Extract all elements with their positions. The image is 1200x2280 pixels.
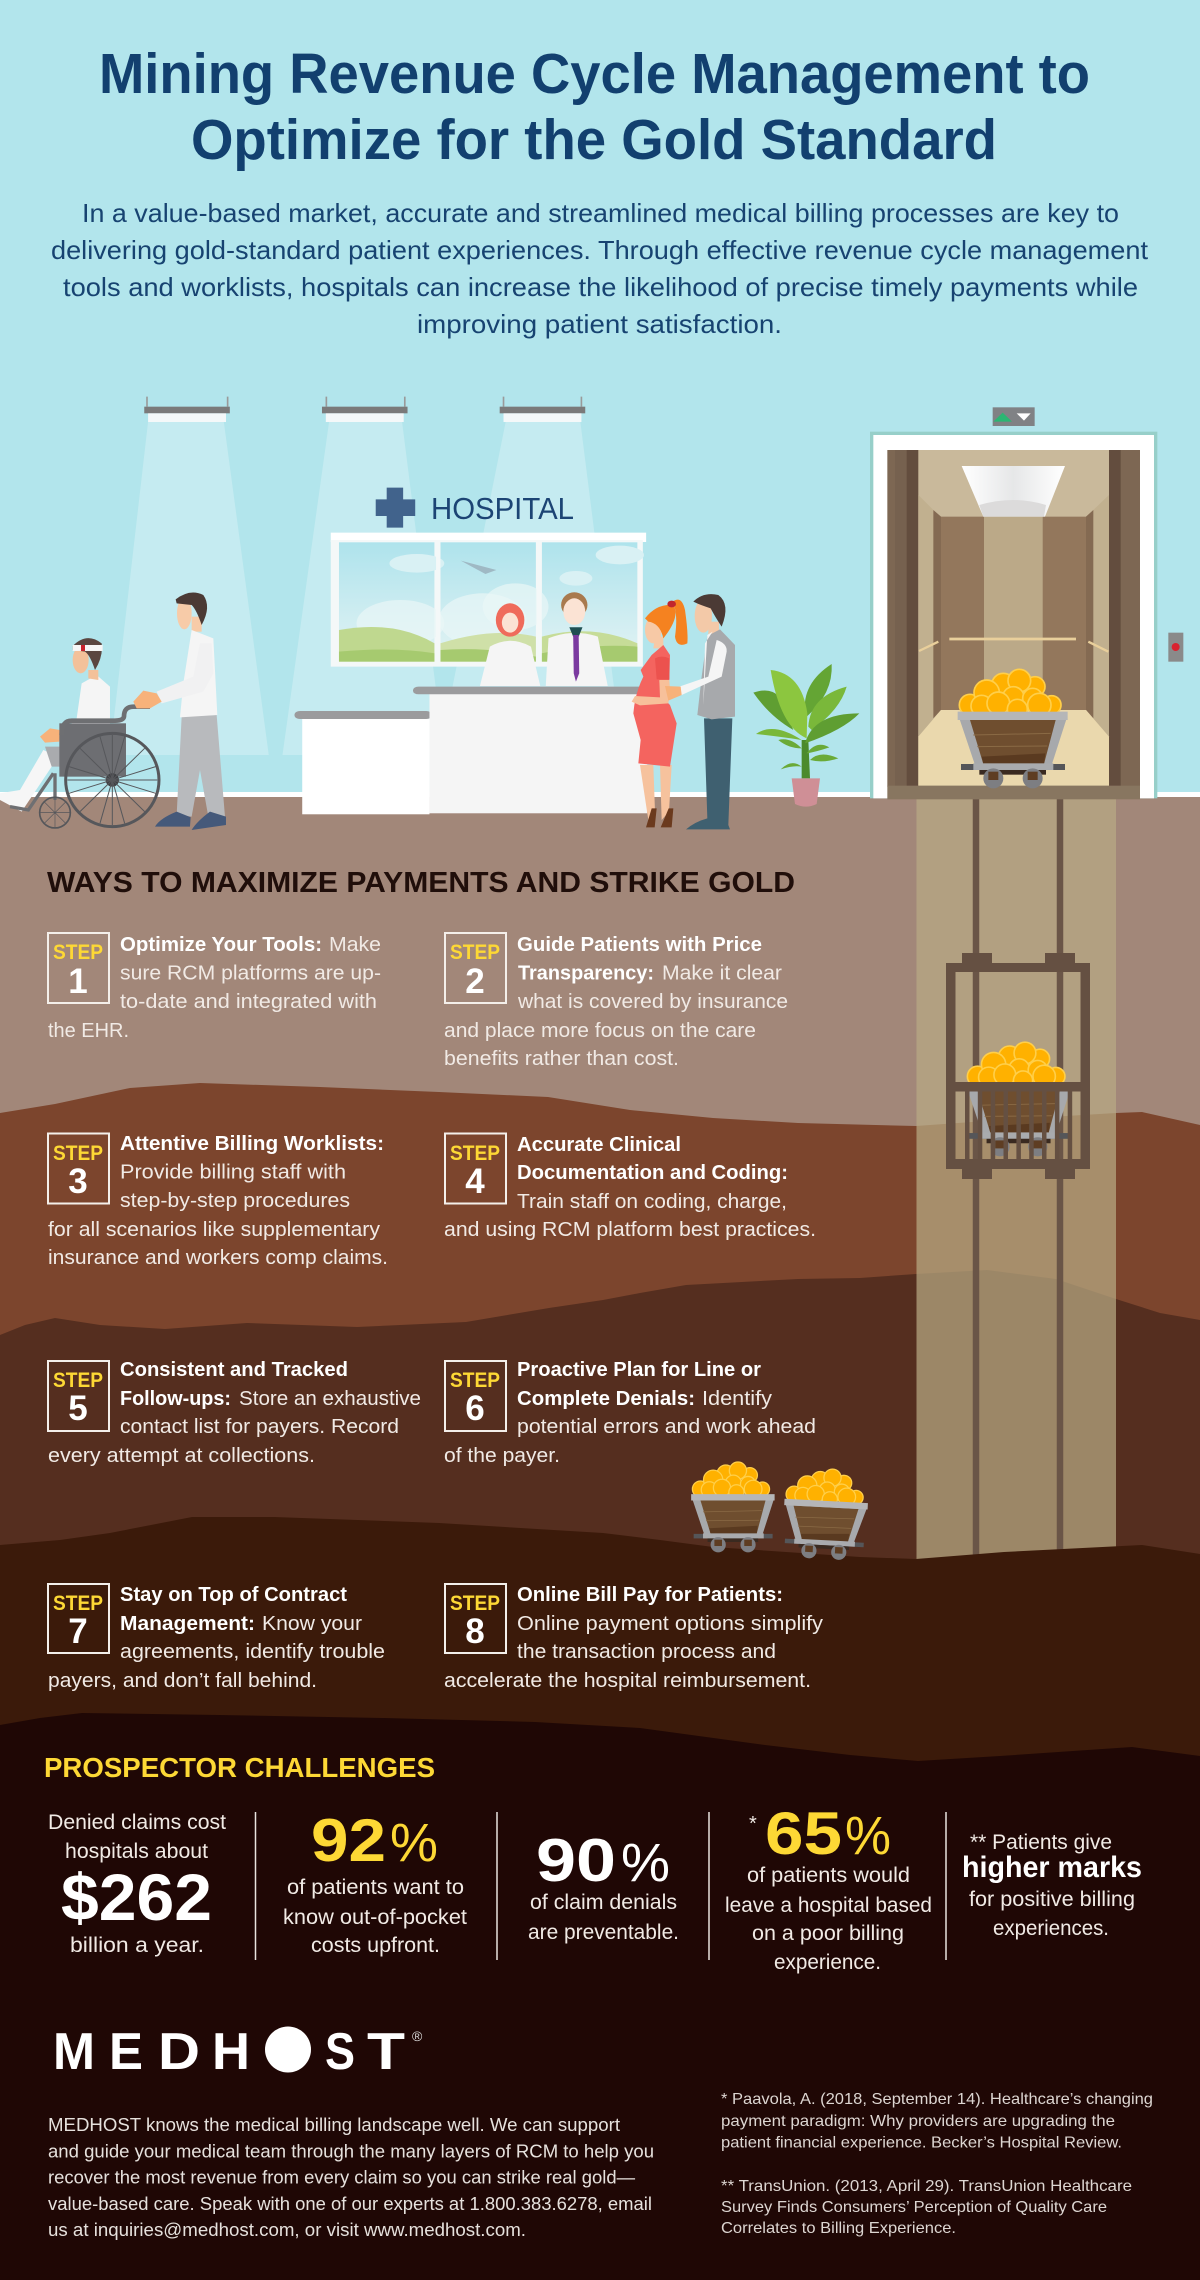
step 2: and place more focus on the care bbox=[444, 1019, 756, 1042]
intro paragraph: tools and worklists, hospitals can increase the likelihood of precise timely payments while bbox=[63, 272, 1138, 302]
stat dividers bbox=[256, 1812, 946, 1960]
section heading: prospector challenges: PROSPECTOR CHALLENGES bbox=[44, 1752, 435, 1783]
stat: 65%: leave a hospital based bbox=[725, 1894, 932, 1917]
side counter bbox=[295, 711, 432, 814]
step 6: of the payer. bbox=[444, 1444, 560, 1467]
step 7: STEP bbox=[53, 1592, 103, 1615]
company description: recover the most revenue from every claim so you can strike real gold— bbox=[48, 2166, 635, 2188]
stat: 65%: of patients would bbox=[747, 1864, 910, 1887]
step 7: Know your bbox=[262, 1612, 362, 1635]
intro paragraph: delivering gold-standard patient experiences. Through effective revenue cycle management bbox=[51, 235, 1149, 265]
references: patient financial experience. Becker’s Hospital Review. bbox=[721, 2134, 1122, 2152]
patient in wheelchair and nurse bbox=[0, 592, 226, 830]
step 7: payers, and don’t fall behind. bbox=[48, 1669, 317, 1692]
references: * Paavola, A. (2018, September 14). Healthcare’s changing bbox=[721, 2091, 1153, 2108]
step 8: accelerate the hospital reimbursement. bbox=[444, 1669, 811, 1692]
references: ** TransUnion. (2013, April 29). TransUnion Healthcare bbox=[721, 2178, 1132, 2195]
soil layer 3 bbox=[0, 1270, 1200, 1600]
hospital sign bbox=[376, 488, 574, 528]
elevator sill bbox=[887, 786, 1140, 799]
step 4 bbox=[444, 1133, 816, 1241]
step 6: Proactive Plan for Line or bbox=[517, 1358, 761, 1381]
hills bbox=[339, 627, 434, 662]
step 5: Store an exhaustive bbox=[239, 1387, 421, 1410]
stat: $262 billion bbox=[48, 1811, 226, 1957]
stat: 90%: are preventable. bbox=[528, 1921, 679, 1944]
wall background bbox=[0, 0, 1200, 800]
gold carts on ledge bbox=[691, 1462, 870, 1561]
nurse bbox=[133, 592, 226, 830]
step 5: every attempt at collections. bbox=[48, 1444, 315, 1467]
stat: 90% bbox=[528, 1827, 679, 1944]
shaft cables bbox=[976, 797, 1060, 1560]
stat: 92%: of patients want to bbox=[287, 1876, 464, 1899]
step 4: Documentation and Coding: bbox=[517, 1161, 788, 1184]
step 3: step-by-step procedures bbox=[120, 1189, 350, 1212]
couple at counter bbox=[632, 594, 735, 829]
step 4: STEP bbox=[450, 1142, 500, 1165]
step 5: Consistent and Tracked bbox=[120, 1358, 348, 1381]
receptionist man bbox=[546, 592, 608, 686]
stat: higher marks: higher marks bbox=[962, 1851, 1142, 1884]
step 7: agreements, identify trouble bbox=[120, 1640, 385, 1663]
stat: 65%: on a poor billing bbox=[752, 1922, 904, 1945]
potted plant bbox=[753, 664, 859, 807]
stat: 92%: 92 bbox=[311, 1807, 386, 1874]
step 7: Stay on Top of Contract bbox=[120, 1583, 347, 1606]
airplane bbox=[461, 561, 496, 574]
step 8: Online payment options simplify bbox=[517, 1612, 824, 1635]
soil layer 4 bbox=[0, 1517, 1200, 1800]
stat: 65%: 65 bbox=[765, 1800, 842, 1867]
step 4: Accurate Clinical bbox=[517, 1133, 681, 1156]
step 2: Make it clear bbox=[662, 962, 782, 984]
step 7: 7 bbox=[68, 1612, 88, 1651]
title bbox=[99, 42, 1090, 172]
step 1: to-date and integrated with bbox=[120, 990, 377, 1013]
ceiling lights bbox=[110, 397, 623, 755]
step 2: Transparency: bbox=[518, 962, 654, 984]
step 6: STEP bbox=[450, 1369, 500, 1392]
white baseboard bbox=[0, 792, 1200, 797]
MEDHOST logo: M bbox=[53, 2023, 95, 2081]
step 8: 8 bbox=[465, 1612, 485, 1651]
stat: $262 billion: Denied claims cost bbox=[48, 1811, 226, 1834]
escorting man bbox=[686, 594, 735, 829]
stat: 65%: experience. bbox=[774, 1951, 881, 1974]
step 1: Optimize Your Tools: bbox=[120, 933, 322, 956]
MEDHOST logo: ® bbox=[412, 2028, 423, 2044]
step 8: the transaction process and bbox=[517, 1640, 776, 1663]
references: Survey Finds Consumers’ Perception of Quality Care bbox=[721, 2199, 1107, 2216]
elevator bbox=[870, 407, 1183, 799]
step 8: STEP bbox=[450, 1592, 500, 1615]
elevator interior bbox=[918, 450, 1109, 787]
references: Correlates to Billing Experience. bbox=[721, 2220, 956, 2237]
reception window bbox=[331, 533, 646, 667]
company description: and guide your medical team through the many layers of RCM to help you bbox=[48, 2140, 654, 2162]
MEDHOST logo: E bbox=[109, 2023, 143, 2081]
references: payment paradigm: Why providers are upgrading the bbox=[721, 2113, 1115, 2130]
step 3: Provide billing staff with bbox=[120, 1160, 346, 1184]
step 2: Guide Patients with Price bbox=[517, 933, 762, 956]
elevator frame bbox=[870, 432, 1157, 798]
hospital lobby scene bbox=[110, 397, 647, 814]
step 2: benefits rather than cost. bbox=[444, 1047, 679, 1070]
patient bbox=[0, 638, 110, 812]
step 5 bbox=[48, 1358, 421, 1467]
gold cart in shaft cage bbox=[966, 1042, 1071, 1156]
man's arm and hand bbox=[679, 640, 727, 695]
MEDHOST logo: H bbox=[212, 2023, 250, 2081]
step 6: potential errors and work ahead bbox=[517, 1415, 816, 1438]
step 7: Management: bbox=[120, 1612, 255, 1635]
step 1: sure RCM platforms are up- bbox=[120, 962, 381, 984]
step 3: insurance and workers comp claims. bbox=[48, 1246, 388, 1269]
step 1: STEP bbox=[53, 941, 103, 964]
MEDHOST logo: D bbox=[158, 2023, 200, 2081]
step 5: Follow-ups: bbox=[120, 1387, 231, 1410]
stat: 92%: costs upfront. bbox=[311, 1934, 440, 1957]
step 6: Complete Denials: bbox=[517, 1387, 695, 1410]
ground layers bbox=[0, 797, 1200, 1137]
MEDHOST logo bbox=[53, 2023, 423, 2081]
pregnant woman bbox=[632, 600, 688, 827]
step 7 bbox=[48, 1583, 385, 1692]
soil layer 2 bbox=[0, 1083, 1200, 1400]
intro paragraph bbox=[51, 198, 1149, 339]
step 4: 4 bbox=[465, 1162, 485, 1201]
step 3: STEP bbox=[53, 1142, 103, 1165]
step 5: STEP bbox=[53, 1369, 103, 1392]
MEDHOST logo: S bbox=[325, 2023, 355, 2081]
step 1: Make bbox=[329, 933, 381, 956]
stat: 65%: % bbox=[845, 1806, 891, 1866]
step 4: and using RCM platform best practices. bbox=[444, 1218, 816, 1241]
call button bbox=[1168, 633, 1183, 662]
stat: 65%: * bbox=[749, 1813, 757, 1835]
step 3 bbox=[48, 1132, 388, 1269]
clouds bbox=[357, 546, 644, 647]
step 2: 2 bbox=[465, 962, 485, 1001]
section heading: ways to maximize: WAYS TO MAXIMIZE PAYMENTS AND STRIKE GOLD bbox=[47, 867, 795, 899]
stat: higher marks: ** Patients give bbox=[970, 1831, 1112, 1854]
main counter bbox=[413, 687, 647, 813]
step 5: 5 bbox=[68, 1389, 88, 1428]
step 4: Train staff on coding, charge, bbox=[517, 1190, 787, 1213]
stat: $262 billion: hospitals about bbox=[65, 1840, 208, 1863]
step 1: the EHR. bbox=[48, 1019, 129, 1042]
company description: us at inquiries@medhost.com, or visit www.medhost.com. bbox=[48, 2219, 526, 2240]
intro paragraph: In a value-based market, accurate and streamlined medical billing processes are key to bbox=[82, 198, 1119, 228]
soil layer 5 bbox=[0, 1713, 1200, 2280]
step 5: contact list for payers. Record bbox=[120, 1415, 399, 1438]
title: Mining Revenue Cycle Management to bbox=[99, 42, 1090, 106]
stat: 92%: know out-of-pocket bbox=[283, 1906, 467, 1929]
step 6: 6 bbox=[465, 1389, 485, 1428]
stat: 65% bbox=[725, 1800, 932, 1974]
mine shaft bbox=[916, 797, 1116, 1567]
stat: 90%: % bbox=[621, 1833, 670, 1893]
stat: 92% bbox=[283, 1807, 467, 1957]
title: Optimize for the Gold Standard bbox=[191, 108, 997, 172]
wheelchair bbox=[10, 707, 159, 828]
step 6 bbox=[444, 1358, 816, 1467]
hospital sign: HOSPITAL bbox=[431, 491, 574, 526]
step 1: 1 bbox=[68, 962, 88, 1001]
step 2: what is covered by insurance bbox=[517, 990, 788, 1013]
step 6: Identify bbox=[702, 1387, 773, 1410]
stat: 90%: 90 bbox=[536, 1827, 616, 1894]
stat: $262 billion: billion a year. bbox=[70, 1934, 204, 1957]
gold cart in elevator bbox=[958, 669, 1068, 788]
step 3: Attentive Billing Worklists: bbox=[120, 1132, 384, 1155]
mine cage bbox=[946, 953, 1090, 1179]
stat: higher marks: for positive billing bbox=[969, 1888, 1135, 1911]
MEDHOST logo: T bbox=[367, 2023, 405, 2081]
step 1 bbox=[48, 933, 381, 1042]
step 3: for all scenarios like supplementary bbox=[48, 1218, 381, 1241]
company description: value-based care. Speak with one of our experts at 1.800.383.6278, email bbox=[48, 2193, 652, 2214]
step 3: 3 bbox=[68, 1162, 88, 1201]
floor indicator bbox=[993, 407, 1035, 426]
company description bbox=[48, 2114, 654, 2240]
intro paragraph: improving patient satisfaction. bbox=[417, 309, 782, 339]
step 8: Online Bill Pay for Patients: bbox=[517, 1583, 783, 1606]
stat: $262 billion: $262 bbox=[61, 1860, 212, 1934]
step 2: STEP bbox=[450, 941, 500, 964]
stat: 92%: % bbox=[390, 1813, 438, 1873]
references bbox=[721, 2091, 1153, 2237]
receptionist woman bbox=[480, 603, 540, 686]
stat: 90%: of claim denials bbox=[530, 1891, 677, 1914]
stat: higher marks bbox=[962, 1831, 1142, 1940]
step 8 bbox=[444, 1583, 824, 1692]
stat: higher marks: experiences. bbox=[993, 1917, 1109, 1940]
step 2 bbox=[444, 933, 788, 1070]
company description: MEDHOST knows the medical billing landscape well. We can support bbox=[48, 2114, 620, 2135]
